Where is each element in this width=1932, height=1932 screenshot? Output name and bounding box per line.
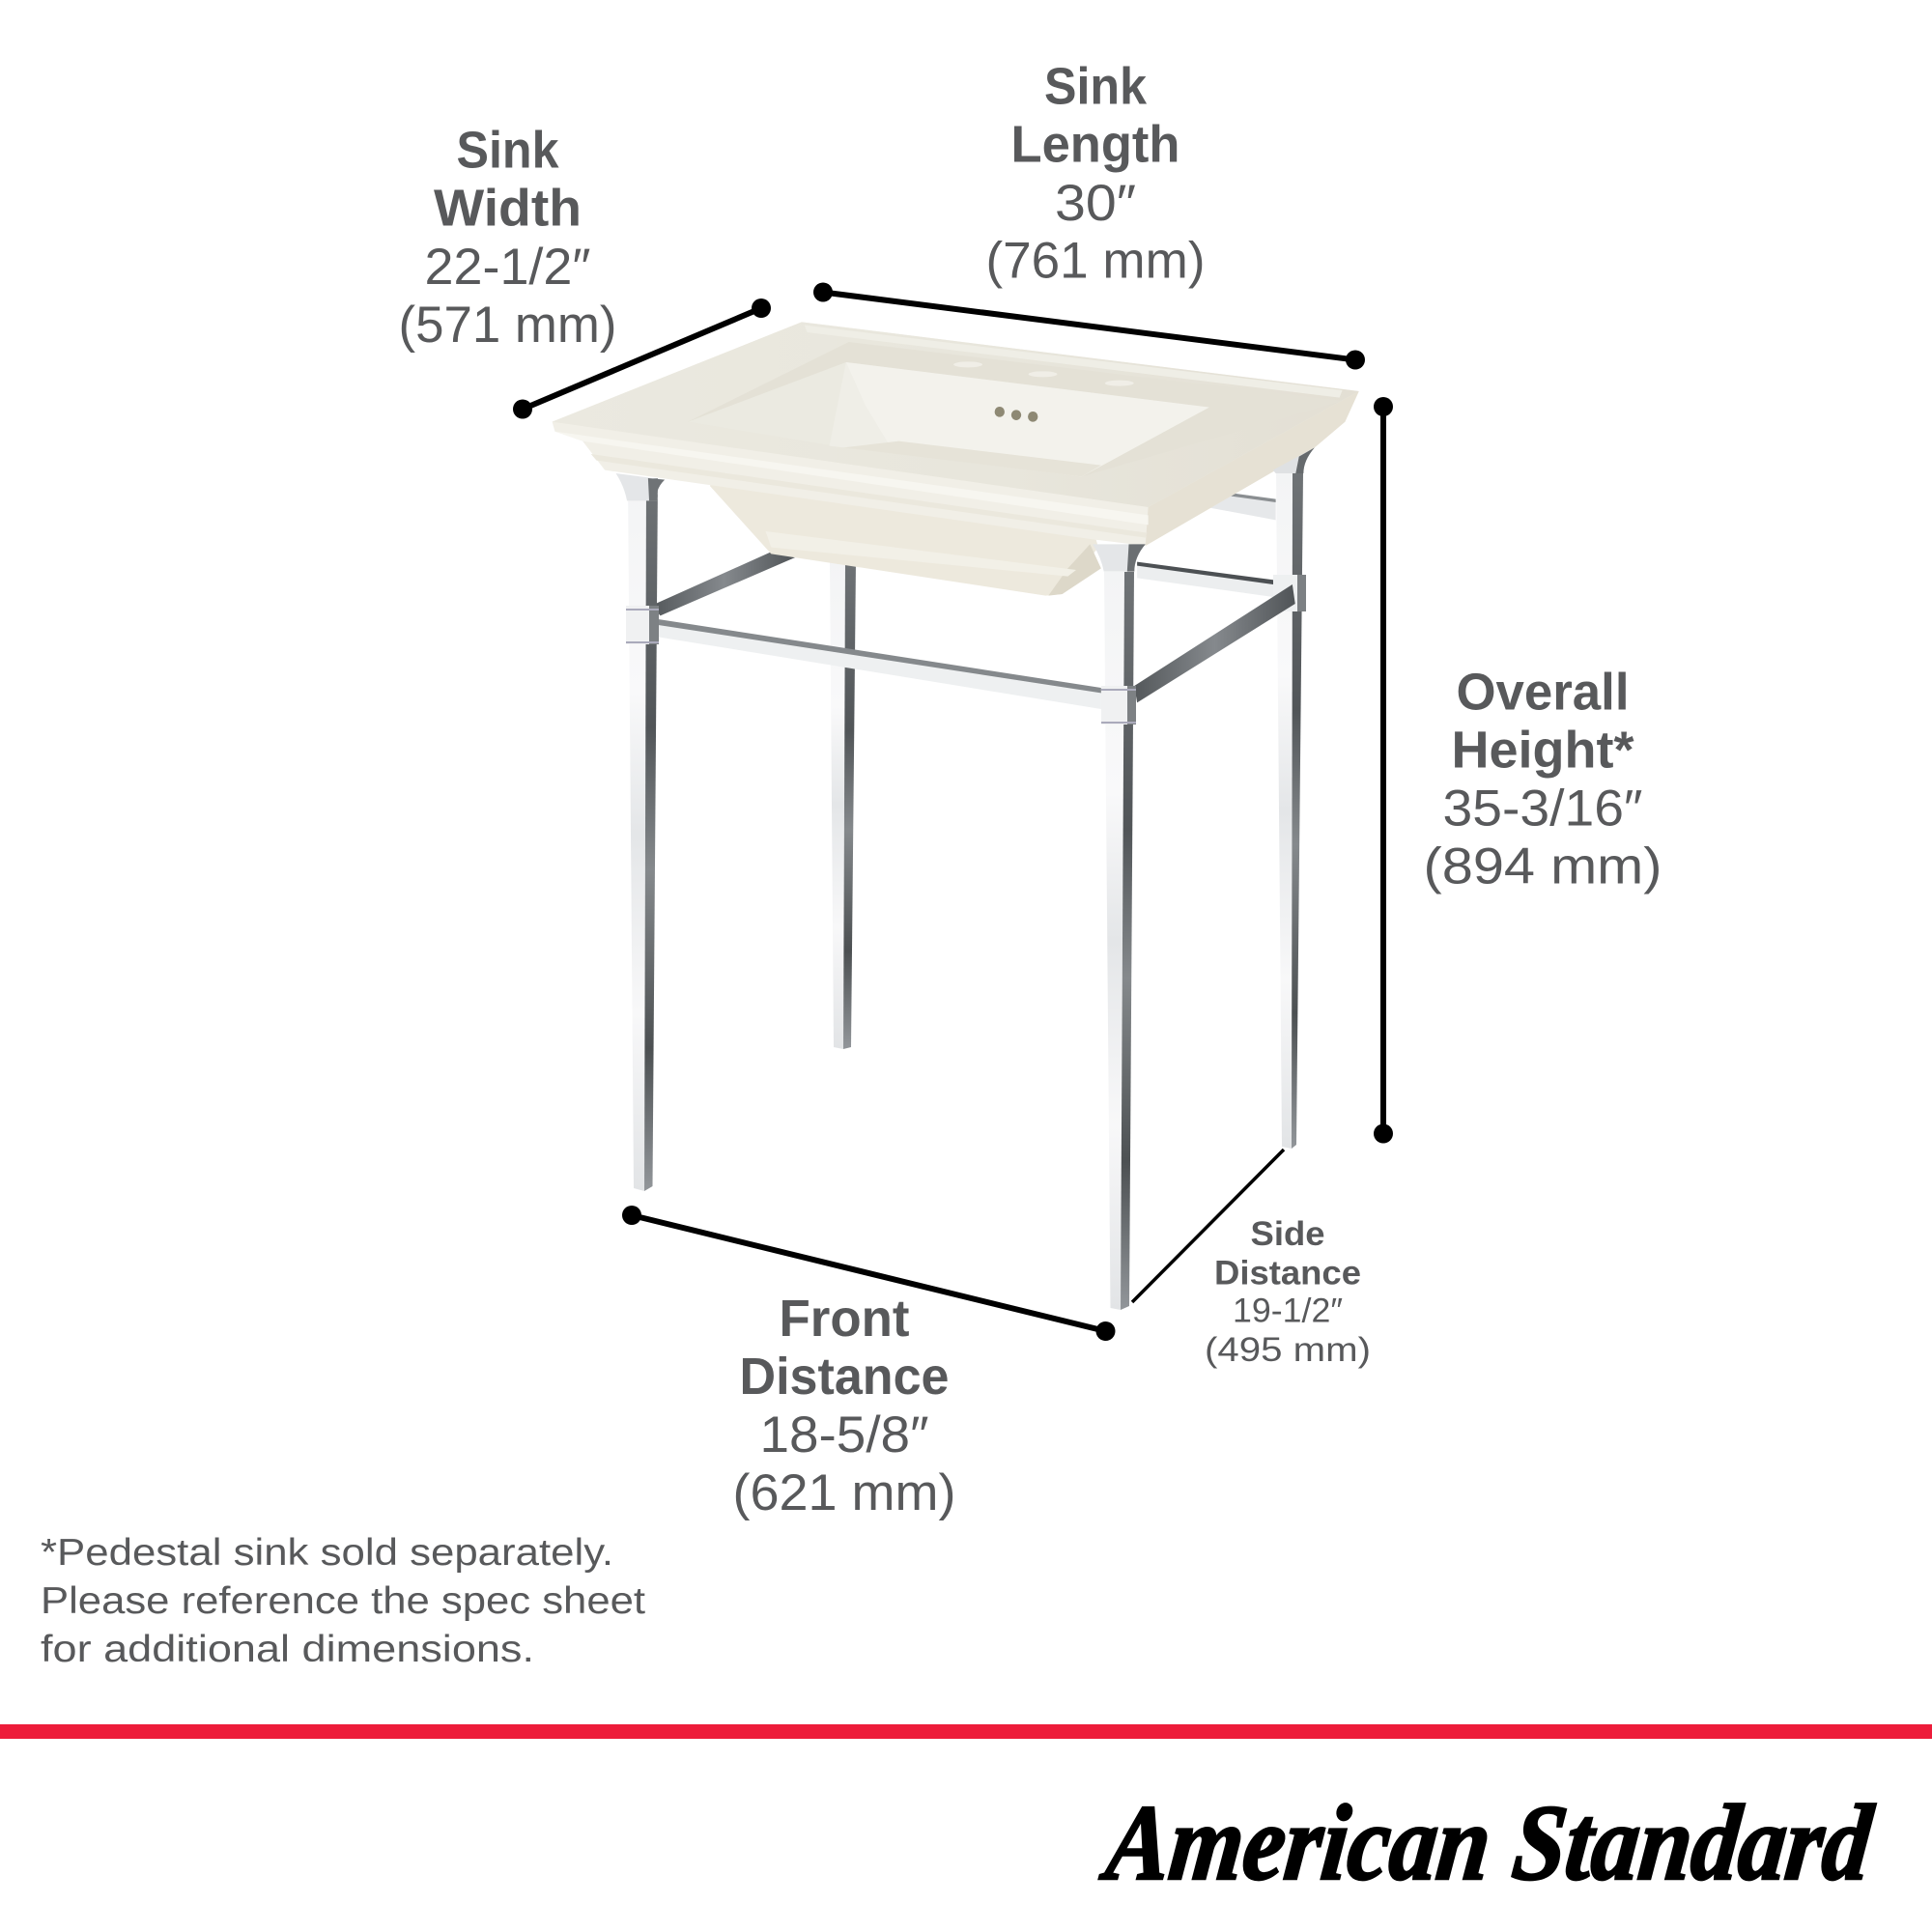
label: side distance xyxy=(1205,1215,1371,1369)
label: sink width xyxy=(398,122,616,354)
rim right side xyxy=(1146,391,1359,546)
basin opening xyxy=(688,362,1209,476)
label: sink width: (571 mm) xyxy=(398,297,616,354)
label: side distance: 19-1/2″ xyxy=(1233,1293,1343,1329)
red divider bar xyxy=(0,1724,1932,1739)
sink rim silhouette xyxy=(553,322,1359,546)
label: sink width: Width xyxy=(434,180,582,238)
sink deck xyxy=(553,322,1359,507)
dimension line: overall height xyxy=(1374,397,1393,1144)
label: sink width: Sink xyxy=(456,122,559,180)
label: side distance: (495 mm) xyxy=(1205,1331,1371,1369)
label: overall height: (894 mm) xyxy=(1424,838,1662,895)
dimension line: sink width xyxy=(513,298,771,419)
label: sink length xyxy=(985,58,1206,290)
label: overall height: 35-3/16″ xyxy=(1443,781,1642,837)
dimension line: side distance xyxy=(1132,1150,1284,1302)
label: front distance: Front xyxy=(779,1290,910,1348)
label: sink width: 22-1/2″ xyxy=(425,239,591,296)
label: overall height xyxy=(1424,663,1662,895)
footnote: for additional dimensions. xyxy=(41,1629,534,1670)
label: front distance: Distance xyxy=(740,1348,949,1406)
sink basin xyxy=(553,322,1359,596)
label: side distance: Distance xyxy=(1214,1254,1361,1293)
back deck band xyxy=(688,342,1343,476)
sink stand front hardware xyxy=(616,447,1315,1310)
label: overall height: Height* xyxy=(1451,721,1634,779)
footnote xyxy=(41,1532,645,1670)
overflow holes xyxy=(995,407,1037,422)
dimension line: front distance xyxy=(622,1206,1115,1341)
label: sink length: 30″ xyxy=(1055,175,1136,232)
label: sink length: (761 mm) xyxy=(985,232,1206,290)
label: front distance xyxy=(732,1290,956,1521)
basin underside xyxy=(710,476,1098,596)
label: sink length: Length xyxy=(1010,116,1180,174)
faucet holes xyxy=(953,361,1134,386)
footnote: Please reference the spec sheet xyxy=(41,1580,645,1622)
label: side distance: Side xyxy=(1250,1215,1325,1253)
footnote: *Pedestal sink sold separately. xyxy=(41,1532,613,1574)
dimension line: sink length xyxy=(813,282,1365,369)
label: front distance: (621 mm) xyxy=(732,1464,956,1521)
rim front moulding xyxy=(554,432,1149,525)
label: sink length: Sink xyxy=(1044,58,1148,116)
sink stand rear hardware xyxy=(652,473,1306,1149)
label: overall height: Overall xyxy=(1457,663,1629,721)
label: front distance: 18-5/8″ xyxy=(759,1406,929,1463)
